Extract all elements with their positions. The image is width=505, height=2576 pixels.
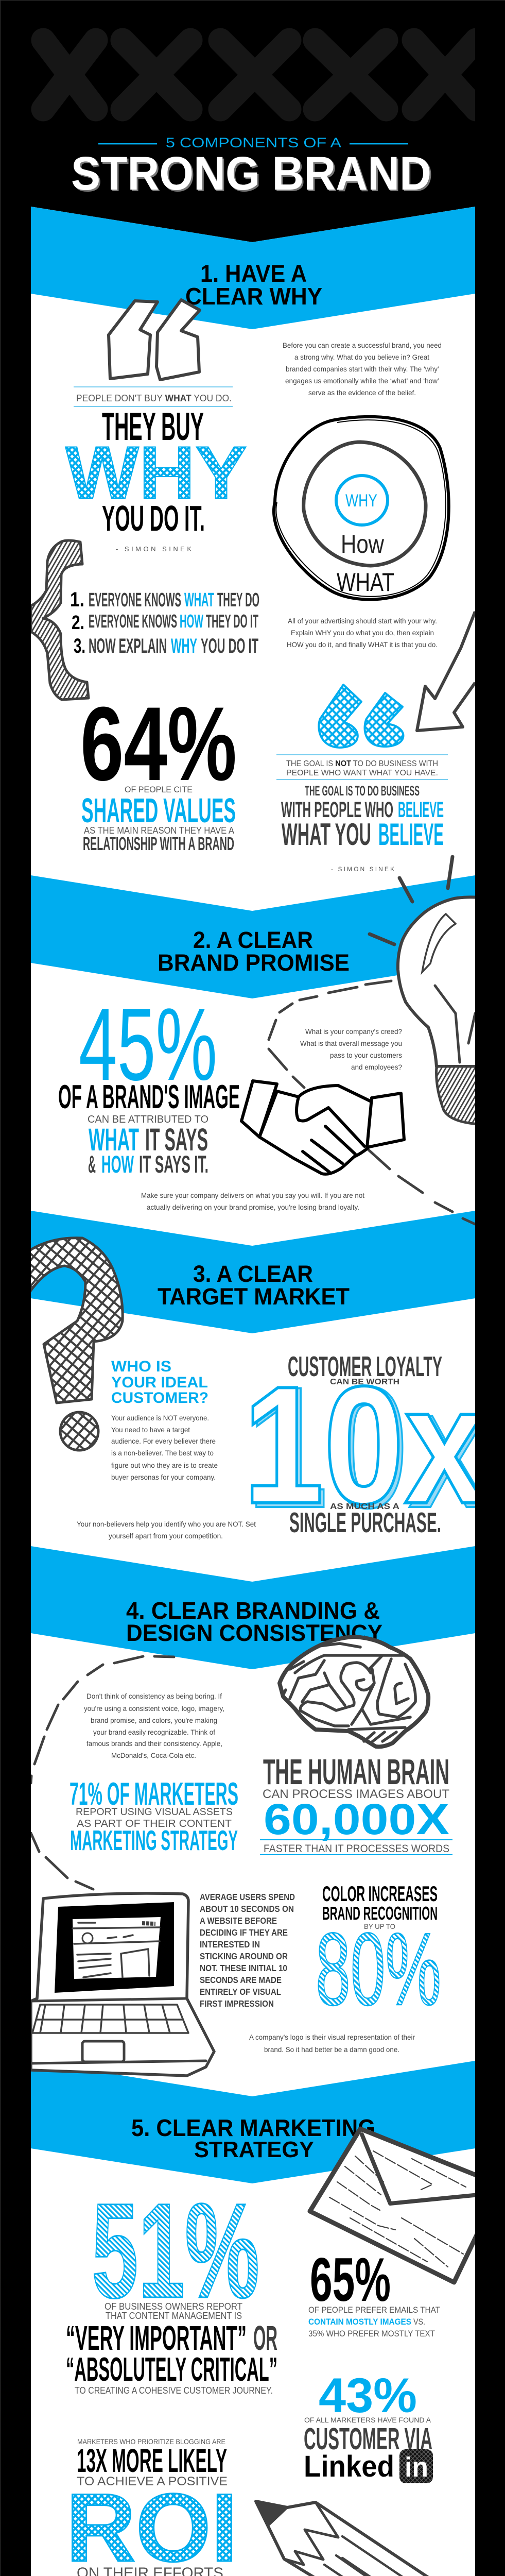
section band 5 (31, 2061, 475, 2183)
heading: section 5 (131, 2114, 375, 2162)
quote: people buy why (65, 386, 247, 553)
pencil body lines (324, 2536, 475, 2576)
text: OR (253, 2319, 277, 2358)
stat: 45% brand image: 45% (79, 987, 217, 1102)
text: need a strong why: a strong why. What do you believe in? Great (294, 353, 429, 361)
text: audience: is a non-believer. The best way to (111, 1449, 214, 1457)
stat: 51% (66, 2175, 277, 2396)
icon: question mark (29, 1238, 123, 1450)
stat: 45% brand image: & (88, 1150, 96, 1178)
steps list: HOW (180, 611, 203, 632)
heading: section 2: BRAND PROMISE (158, 950, 350, 976)
text: first impression: A WEBSITE BEFORE (200, 1916, 277, 1926)
stat: 65%: 65% (310, 2245, 391, 2314)
stat: 71% of marketers (69, 1776, 238, 1856)
text: consistency: Don't think of consistency as being boring. If (86, 1692, 222, 1700)
dashed connector: brain to laptop (31, 1656, 174, 1889)
icon: hatched curly bracket (31, 540, 89, 700)
decorative painted X pattern (43, 40, 476, 109)
label: how: How (341, 530, 385, 558)
text: deliver on promise: actually delivering on your brand promise, you're losing brand loyalty. (147, 1203, 359, 1211)
text: consistency: McDonald's, Coca-Cola etc. (111, 1751, 196, 1759)
text: audience: figure out who they are is to create (111, 1461, 218, 1469)
hand detail (297, 1097, 364, 1172)
text: logo: A company's logo is their visual representation of their (249, 2033, 415, 2041)
steps list: WHY (171, 635, 197, 657)
text: audience (111, 1414, 218, 1481)
stat: 51%: TO CREATING A COHESIVE CUSTOMER JOURNEY. (75, 2385, 273, 2396)
steps list: NOW EXPLAIN (89, 635, 167, 657)
steps list: 2. (72, 612, 84, 634)
heading: section 3: 3. A CLEAR (193, 1261, 313, 1287)
quote: people buy why: YOU DO IT. (102, 498, 205, 538)
heading: section 4 (126, 1597, 382, 1646)
heading: section 2: 2. A CLEAR (193, 927, 313, 953)
text: logo: brand. So it had better be a damn good one. (264, 2045, 399, 2054)
text: company creed (300, 1027, 402, 1071)
bulb screw base (437, 1066, 479, 1124)
heading: ideal customer: WHO IS (111, 1358, 171, 1375)
stat: 45% brand image (58, 987, 240, 1178)
text: non-believers: yourself apart from your competition. (109, 1532, 223, 1540)
text: need a strong why: branded companies start with their why. The ‘why’ (286, 365, 439, 373)
quote: goal is believe (276, 754, 448, 873)
text: audience: audience. For every believer there (111, 1437, 216, 1445)
stat: 51%: THAT CONTENT MANAGEMENT IS (106, 2311, 242, 2321)
heading: section 5: 5. CLEAR MARKETING (131, 2114, 375, 2141)
left cuff (241, 1081, 277, 1137)
text: need a strong why: serve as the evidence of the belief. (308, 388, 416, 397)
stat: 43% linkedin: in (405, 2452, 428, 2483)
steps list: 3. (74, 635, 85, 657)
stat: 71% of marketers: AS PART OF THEIR CONTENT (77, 1818, 232, 1829)
text: first impression: DECIDING IF THEY ARE (200, 1927, 288, 1938)
stat: 45% brand image: OF A BRAND'S IMAGE (58, 1078, 240, 1115)
text: THEY DO (217, 589, 259, 611)
steps list: 1. (70, 588, 84, 611)
stat: 43% linkedin: OF ALL MARKETERS HAVE FOUND A (304, 2416, 431, 2424)
text: advertising: HOW you do it, and finally WHAT it is that you do. (287, 640, 438, 649)
icon: pencil (256, 2501, 479, 2576)
quote: goal is believe: BELIEVE (398, 798, 444, 822)
text: audience: You need to have a target (111, 1426, 190, 1434)
icon: handshake (241, 1081, 404, 1174)
text: first impression: AVERAGE USERS SPEND (200, 1892, 295, 1902)
steps list: EVERYONE KNOWS (89, 589, 181, 611)
quote: goal is believe: THE GOAL IS NOT TO DO BUSINESS WITH (286, 759, 438, 768)
stat: 43% linkedin: Linked (304, 2450, 394, 2483)
title: STRONG BRAND (73, 149, 433, 201)
label: why: WHY (345, 491, 377, 511)
text: company creed: pass to your customers (330, 1051, 402, 1059)
quote: people buy why: THEY BUY (102, 405, 204, 449)
stat: blogging ROI: MARKETERS WHO PRIORITIZE BLOGGING ARE (77, 2437, 225, 2446)
heading: section 4: DESIGN CONSISTENCY (126, 1620, 382, 1646)
text: first impression: SECONDS ARE MADE (200, 1975, 282, 1985)
text: audience: Your audience is NOT everyone. (111, 1414, 209, 1422)
text: first impression: STICKING AROUND OR (200, 1951, 288, 1961)
envelope flap (362, 2134, 479, 2204)
icon: light bulb (370, 857, 479, 1124)
text: first impression: FIRST IMPRESSION (200, 1998, 274, 2009)
quote: people buy why: WHY (65, 431, 247, 515)
stat: 51%: “ABSOLUTELY CRITICAL” (66, 2350, 277, 2388)
browser content (73, 1923, 160, 1977)
heading: ideal customer (111, 1358, 208, 1406)
title: 5 COMPONENTS OF A (166, 135, 341, 150)
stat: 45% brand image: WHAT (89, 1122, 139, 1157)
browser window buttons (142, 1923, 155, 1924)
stat: 65% (308, 2245, 440, 2338)
stat: 45% brand image: IT SAYS IT. (139, 1150, 208, 1178)
stat: 64% shared values: OF PEOPLE CITE (125, 785, 193, 794)
stat: 51%: OF BUSINESS OWNERS REPORT (105, 2301, 242, 2312)
stat: human brain 60,000x: CAN PROCESS IMAGES ABOUT (263, 1787, 449, 1801)
text: deliver on promise: Make sure your company delivers on what you say you will. If you are not (141, 1191, 364, 1199)
section band 4 (31, 1546, 475, 1669)
text: company creed: What is your company's creed? (305, 1027, 402, 1036)
stat: 64% shared values: 64% (80, 685, 237, 803)
stat: color 80% (316, 1882, 441, 2027)
steps list: THEY DO IT (206, 611, 258, 632)
stat: 51%: “VERY IMPORTANT” (66, 2319, 247, 2358)
question mark dot (60, 1412, 98, 1450)
stat: 71% of marketers: REPORT USING VISUAL ASSETS (76, 1807, 233, 1818)
icon: laptop (31, 1893, 214, 2076)
stat: 64% shared values (80, 685, 237, 854)
text: advertising: Explain WHY you do what you do, then explain (291, 629, 434, 637)
stat: 43% linkedin (304, 2368, 433, 2483)
stat: 64% shared values: SHARED VALUES (81, 791, 236, 830)
heading: section 5: STRATEGY (194, 2137, 314, 2162)
stat: 45% brand image: CAN BE ATTRIBUTED TO (88, 1114, 208, 1125)
icon: brain (280, 1637, 428, 1747)
quote: goal is believe: PEOPLE WHO WANT WHAT YOU HAVE. (286, 769, 438, 777)
heading: section 3: TARGET MARKET (158, 1283, 350, 1310)
heading: section 3 (158, 1261, 350, 1310)
icon: sketched quotation mark (109, 300, 200, 380)
text: audience: buyer personas for your company. (111, 1473, 216, 1481)
stat: 71% of marketers: 71% OF MARKETERS (69, 1776, 238, 1812)
steps list (70, 588, 259, 657)
stat: 65%: CONTAIN MOSTLY IMAGES (308, 2317, 411, 2327)
text: non-believers: Your non-believers help you identify who you are NOT. Set (77, 1520, 256, 1528)
stat: blogging ROI: TO ACHIEVE A POSITIVE (77, 2475, 228, 2488)
quote: people buy why: - SIMON SINEK (116, 545, 191, 553)
stat: color 80%: BY UP TO (364, 1922, 395, 1930)
text: consistency: your brand easily recognizable. Think of (93, 1728, 215, 1736)
steps list: EVERYONE KNOWS (89, 611, 177, 632)
label: what: WHAT (337, 568, 394, 597)
trackpad (82, 2041, 124, 2062)
text: need a strong why: Before you can create a successful brand, you need (283, 341, 442, 349)
icon: envelope (310, 2129, 479, 2282)
text: consistency (84, 1692, 224, 1759)
stat: 65%: 35% WHO PREFER MOSTLY TEXT (308, 2329, 435, 2338)
text: first impression: ABOUT 10 SECONDS ON (200, 1904, 294, 1914)
brain folds (283, 1643, 415, 1743)
text: advertising: All of your advertising should start with your why. (288, 617, 437, 625)
stat: 65%: VS. (413, 2317, 425, 2327)
pencil tip (256, 2501, 287, 2526)
quote: goal is believe: - SIMON SINEK (331, 866, 394, 873)
stat: 71% of marketers: MARKETING STRATEGY (70, 1824, 238, 1856)
text: consistency: you're using a consistent voice, logo, imagery, (84, 1704, 224, 1713)
steps list: YOU DO IT (201, 635, 258, 657)
text: need a strong why: engages us emotionally while the ‘what’ and ‘how’ (285, 377, 439, 385)
text: advertising (287, 617, 438, 649)
text: first impression: ENTIRELY OF VISUAL (200, 1987, 281, 1997)
title: STRONG BRAND (71, 147, 431, 200)
stat: 43% linkedin: 43% (319, 2368, 417, 2423)
icon: blue hatched quote (319, 685, 403, 748)
stat: human brain 60,000x: 60,000X (264, 1795, 449, 1843)
right cuff (367, 1093, 404, 1147)
quote: people buy why: PEOPLE DON'T BUY WHAT YOU DO. (76, 393, 232, 403)
stat: 64% shared values: RELATIONSHIP WITH A BRAND (83, 833, 234, 854)
icon: linkedin badge (399, 2449, 433, 2483)
text: company creed: and employees? (351, 1063, 402, 1071)
text: logo (249, 2033, 415, 2054)
text: first impression: INTERESTED IN (200, 1939, 260, 1950)
text: consistency: famous brands and their consistency. Apple, (86, 1739, 222, 1748)
stat: customer loyalty 10x: CAN BE WORTH (330, 1378, 399, 1386)
heading: section 4: 4. CLEAR BRANDING & (126, 1597, 380, 1624)
keyboard (32, 2005, 188, 2033)
text: company creed: What is that overall message you (300, 1039, 402, 1047)
heading: section 1: CLEAR WHY (185, 283, 322, 310)
section band 3 (31, 1211, 475, 1333)
section band 1 (31, 207, 475, 329)
bulb rays (370, 857, 452, 944)
bulb highlight (422, 914, 456, 972)
text: first impression (200, 1892, 295, 2009)
steps list: WHAT (184, 589, 214, 611)
diagram: golden circle (274, 417, 449, 600)
stat: blogging ROI: 13X MORE LIKELY (77, 2442, 227, 2479)
quote: goal is believe: WITH PEOPLE WHO (281, 798, 393, 822)
dashed connector: bulb to handshake (269, 981, 476, 1225)
heading: section 1: 1. HAVE A (200, 260, 307, 287)
stat: 65%: OF PEOPLE PREFER EMAILS THAT (308, 2305, 440, 2315)
bulb filament (435, 986, 475, 1062)
laptop screen (55, 1902, 174, 1993)
section band 2 (31, 875, 475, 998)
heading: section 2 (158, 927, 350, 976)
stat: human brain 60,000x (260, 1752, 452, 1855)
stat: customer loyalty 10x: AS MUCH AS A (330, 1502, 400, 1511)
stat: human brain 60,000x: FASTER THAN IT PROCESSES WORDS (264, 1843, 449, 1855)
text: non-believers (77, 1520, 256, 1540)
heading: ideal customer: CUSTOMER? (111, 1389, 208, 1406)
envelope scribble (329, 2151, 466, 2267)
pencil sharpened edge (284, 2502, 338, 2565)
heading: ideal customer: YOUR IDEAL (111, 1374, 208, 1391)
text: first impression: NOT. THESE INITIAL 10 (200, 1963, 287, 1973)
heading: section 1 (185, 260, 322, 310)
quote: goal is believe: WHAT YOU (282, 817, 371, 852)
text: need a strong why (283, 341, 442, 397)
stat: 64% shared values: AS THE MAIN REASON THEY HAVE A (84, 825, 234, 836)
text: consistency: brand promise, and colors, you're making (91, 1716, 217, 1724)
text: deliver on promise (141, 1191, 364, 1211)
stat: 45% brand image: HOW (101, 1150, 134, 1178)
stat: 51%: 51% (92, 2175, 259, 2326)
icon: right grey quote outline (417, 612, 475, 731)
stat: 45% brand image: IT SAYS (145, 1122, 208, 1157)
